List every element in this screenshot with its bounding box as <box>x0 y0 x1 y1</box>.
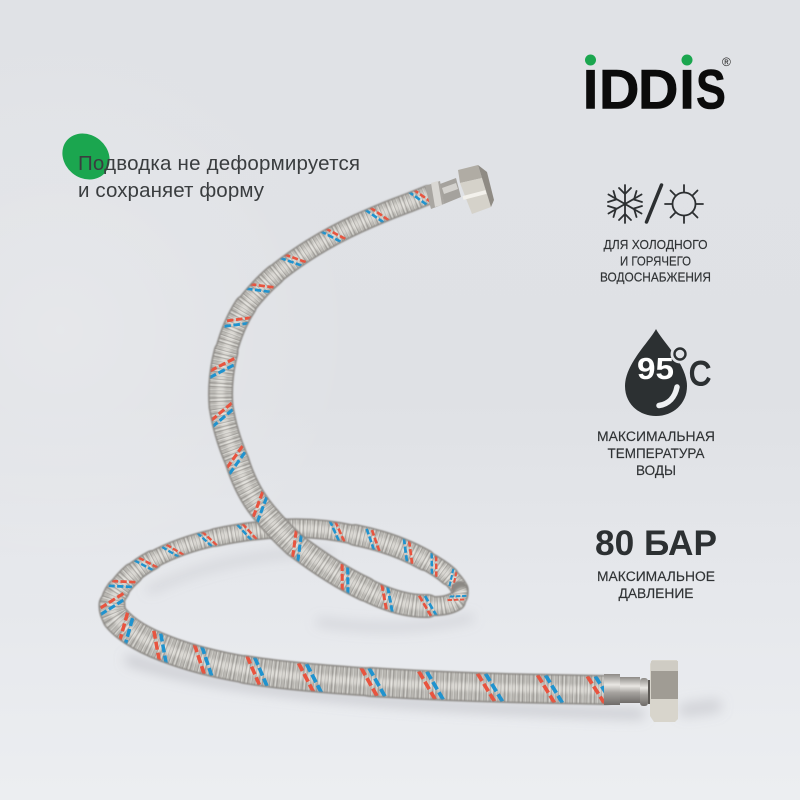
label: max water temperature <box>597 429 715 478</box>
logo: IDDIS: S <box>696 58 726 121</box>
label: max pressure <box>597 569 715 601</box>
braided hose: lower loop <box>101 520 613 704</box>
icon: water drop 95 degrees <box>625 329 711 416</box>
icon: water drop 95 degrees: 95 <box>637 351 674 386</box>
icon: water drop 95 degrees: C <box>689 355 711 393</box>
logo: IDDIS: IDDI <box>583 58 695 120</box>
icon: snowflake <box>608 185 642 223</box>
label: max pressure: ДАВЛЕНИЕ <box>618 586 694 601</box>
pressure value: 80 БАР <box>595 524 717 563</box>
braided hose: rising strand <box>209 185 466 616</box>
label: water supply <box>600 237 711 284</box>
caption text: Подводка не деформируется <box>78 152 360 175</box>
icon: slash <box>646 185 662 222</box>
hose shadow on the floor <box>130 552 715 714</box>
logo: IDDIS: ® <box>722 55 731 69</box>
green dot accent <box>53 124 119 189</box>
label: water supply: ДЛЯ ХОЛОДНОГО <box>604 237 708 252</box>
top fitting <box>425 165 494 214</box>
caption text: и сохраняет форму <box>78 179 265 202</box>
bottom fitting <box>604 660 678 722</box>
label: max water temperature: МАКСИМАЛЬНАЯ <box>597 429 715 444</box>
label: max water temperature: ВОДЫ <box>636 463 676 478</box>
caption text <box>78 152 360 202</box>
label: max water temperature: ТЕМПЕРАТУРА <box>608 446 704 461</box>
label: water supply: И ГОРЯЧЕГО <box>620 254 691 268</box>
icon: sun <box>665 185 703 223</box>
label: max pressure: МАКСИМАЛЬНОЕ <box>597 569 715 584</box>
label: water supply: ВОДОСНАБЖЕНИЯ <box>600 270 711 284</box>
